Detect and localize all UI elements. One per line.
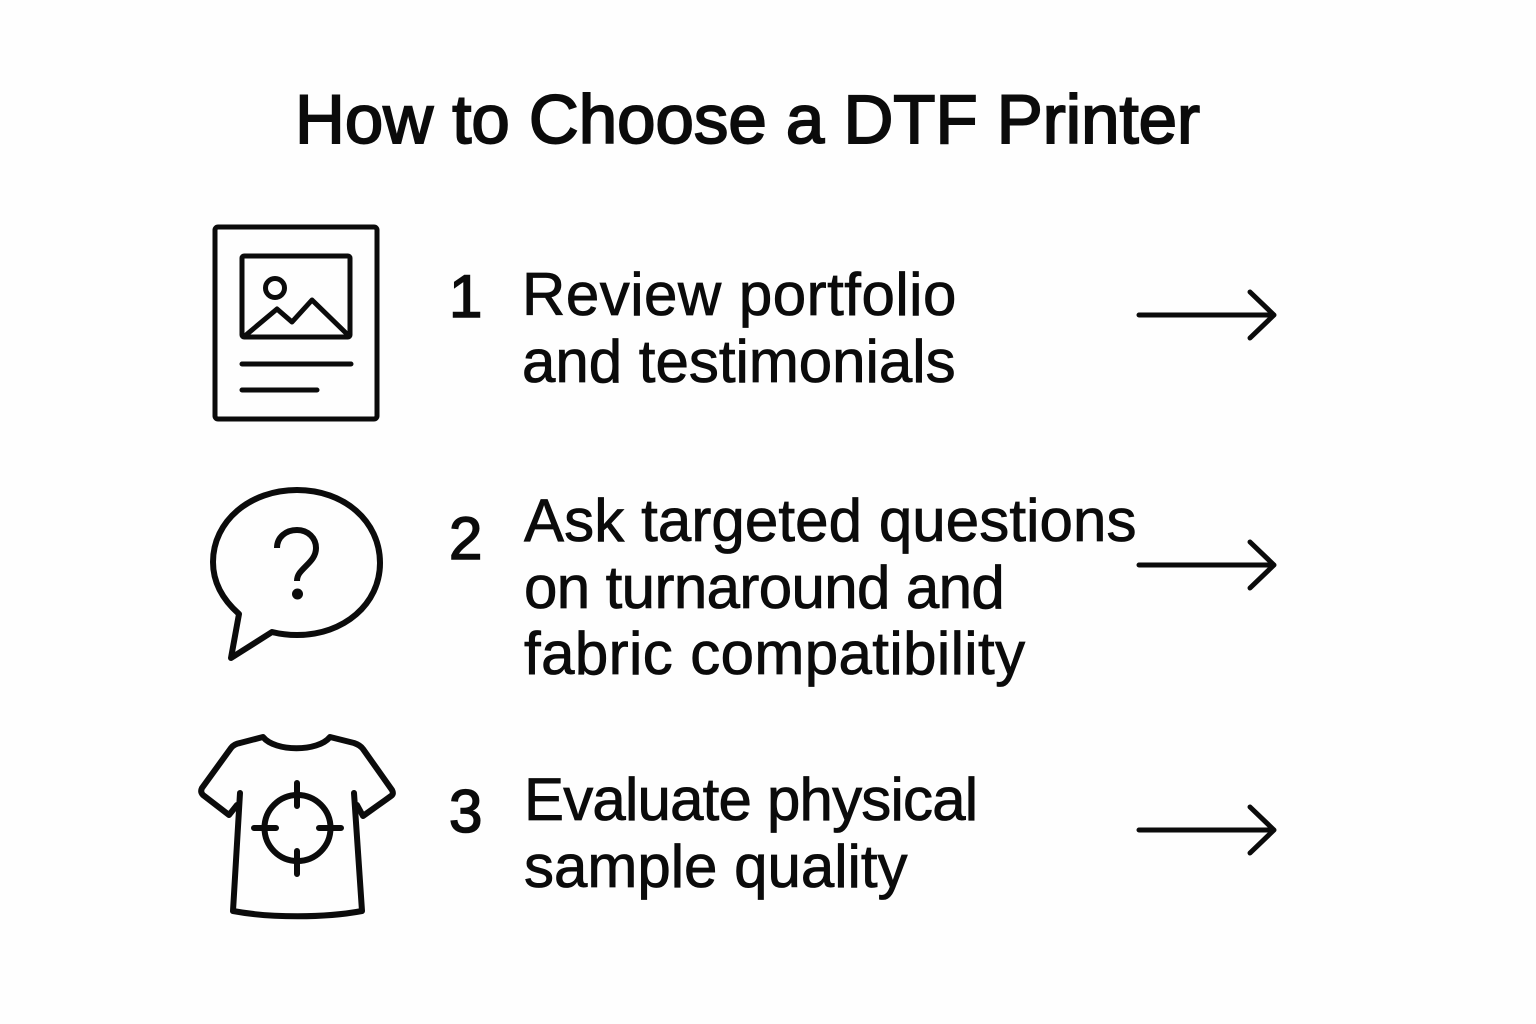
step 2 text: on turnaround and — [524, 554, 1004, 620]
icon: portfolio document — [212, 224, 380, 422]
step 3 text — [524, 766, 977, 900]
step 1 text: Review portfolio — [522, 261, 957, 328]
step 2 number: 2 — [449, 505, 482, 572]
step 2 text — [524, 487, 1137, 687]
step 1 number: 1 — [449, 263, 482, 330]
title: How to Choose a DTF Printer — [295, 81, 1200, 158]
icon: t-shirt with target — [198, 734, 396, 920]
arrow 1 — [1136, 290, 1276, 340]
step 1 text: and testimonials — [522, 328, 956, 395]
arrow 2 — [1136, 540, 1276, 590]
step 2 text: Ask targeted questions — [524, 487, 1137, 554]
arrow 3 — [1136, 804, 1276, 856]
step 2 text: fabric compatibility — [524, 620, 1026, 687]
step 1 text — [522, 261, 957, 395]
icon: question speech bubble — [210, 487, 383, 661]
step 3 text: Evaluate physical — [524, 766, 977, 833]
step 3 number: 3 — [449, 778, 482, 845]
step 3 text: sample quality — [524, 833, 908, 900]
